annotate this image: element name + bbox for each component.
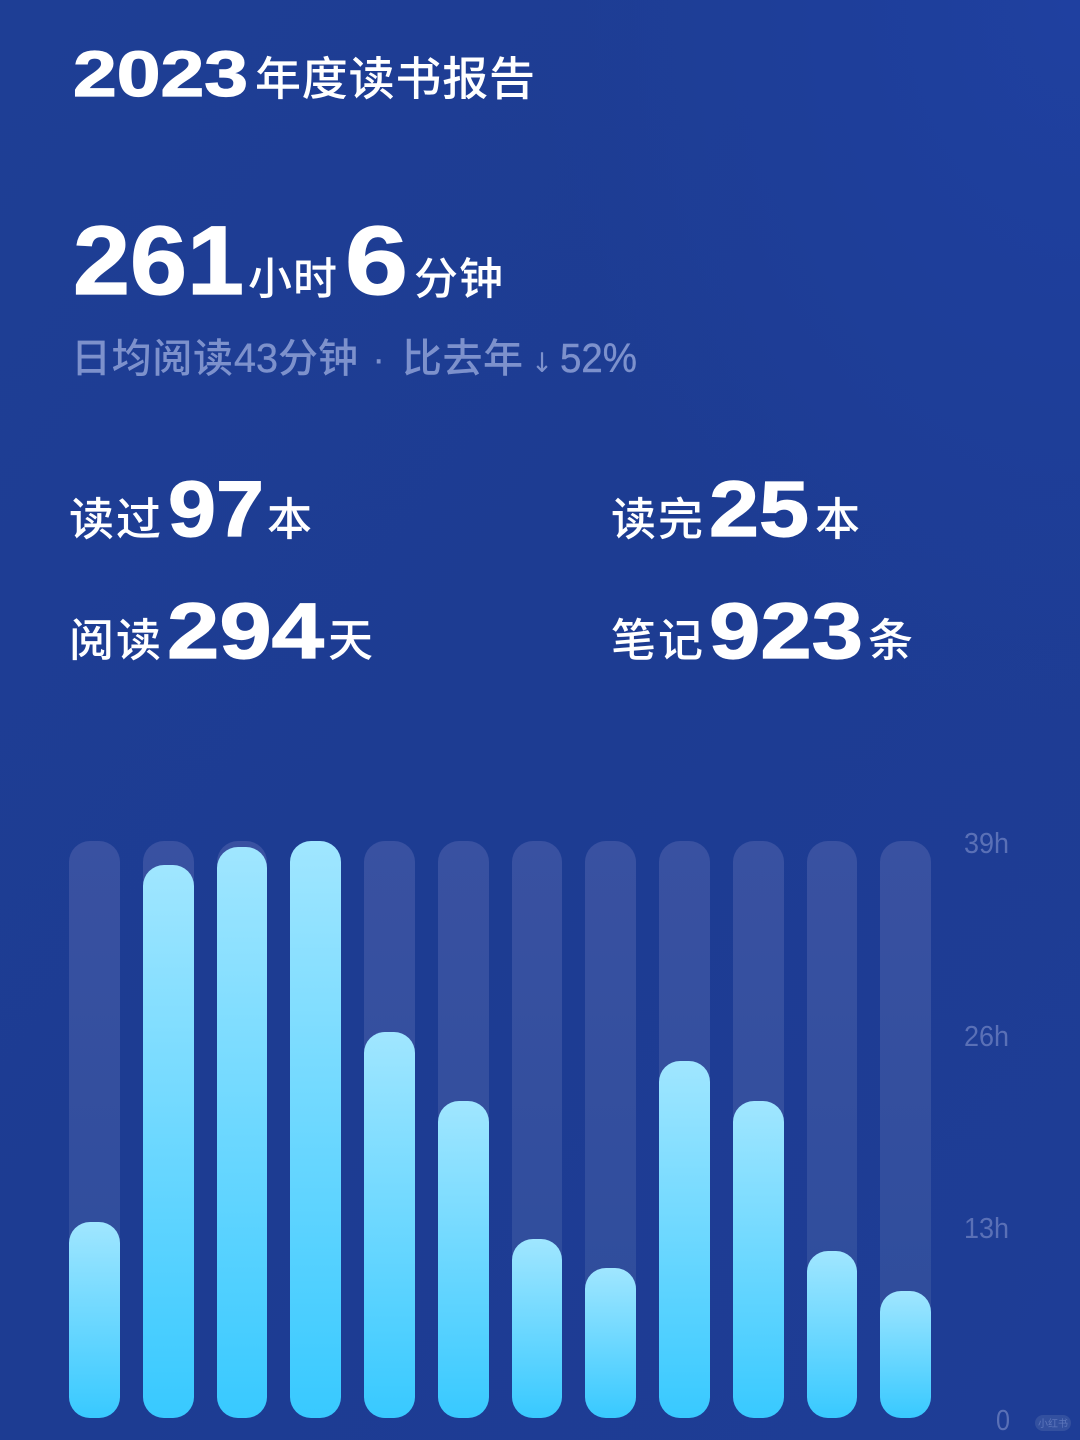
April bar [290,841,341,1418]
August bar [585,841,636,1418]
bar chart: monthly reading hours [69,841,931,1418]
May bar [364,841,415,1418]
daily average and year comparison: 比去年 [402,337,523,381]
y-axis labels: 39h [964,828,1009,860]
stat: reading days: 阅读 [69,615,161,666]
stat: notes: 笔记 [611,615,703,666]
March bar [217,841,267,1418]
stat: books finished: 25 [709,464,809,553]
daily average and year comparison: ↓ [531,348,553,379]
stat: notes: 条 [868,615,913,666]
stat: books finished [611,464,860,553]
watermark [1035,1415,1071,1431]
stat: books read: 本 [267,494,312,545]
total reading time: 小时 [248,255,337,304]
July bar [512,841,562,1418]
February bar [143,841,194,1418]
daily average and year comparison: · [372,337,385,381]
June bar [438,841,489,1418]
total reading time: 分钟 [414,255,503,304]
stat: books read [69,464,312,553]
stat: books read: 97 [168,464,264,553]
y-axis labels [964,828,1010,1437]
November bar [807,841,857,1418]
total reading time: 261 [73,206,244,315]
stat: reading days [69,586,373,675]
title [73,38,535,110]
stat: books read: 读过 [69,494,161,545]
total reading time: 6 [345,206,408,315]
October bar [733,841,784,1418]
stat: reading days: 294 [167,586,324,675]
daily average and year comparison: 43 [234,335,278,381]
stat: notes: 923 [709,586,863,675]
watermark: 小红书 [1038,1417,1068,1430]
daily average and year comparison: 分钟 [278,337,358,381]
y-axis labels: 0 [996,1405,1010,1437]
daily average and year comparison [71,335,637,381]
y-axis labels: 26h [964,1021,1009,1053]
January bar [69,841,120,1418]
daily average and year comparison: 日均阅读 [71,337,233,381]
daily average and year comparison: 52% [560,335,637,381]
September bar [659,841,710,1418]
total reading time [73,206,503,315]
December bar [880,841,931,1418]
stat: books finished: 读完 [611,494,703,545]
y-axis labels: 13h [964,1213,1009,1245]
stat: notes [611,586,913,675]
stat: books finished: 本 [815,494,860,545]
title: 2023 [73,38,248,110]
stat: reading days: 天 [328,615,373,666]
title: 年度读书报告 [255,53,535,105]
